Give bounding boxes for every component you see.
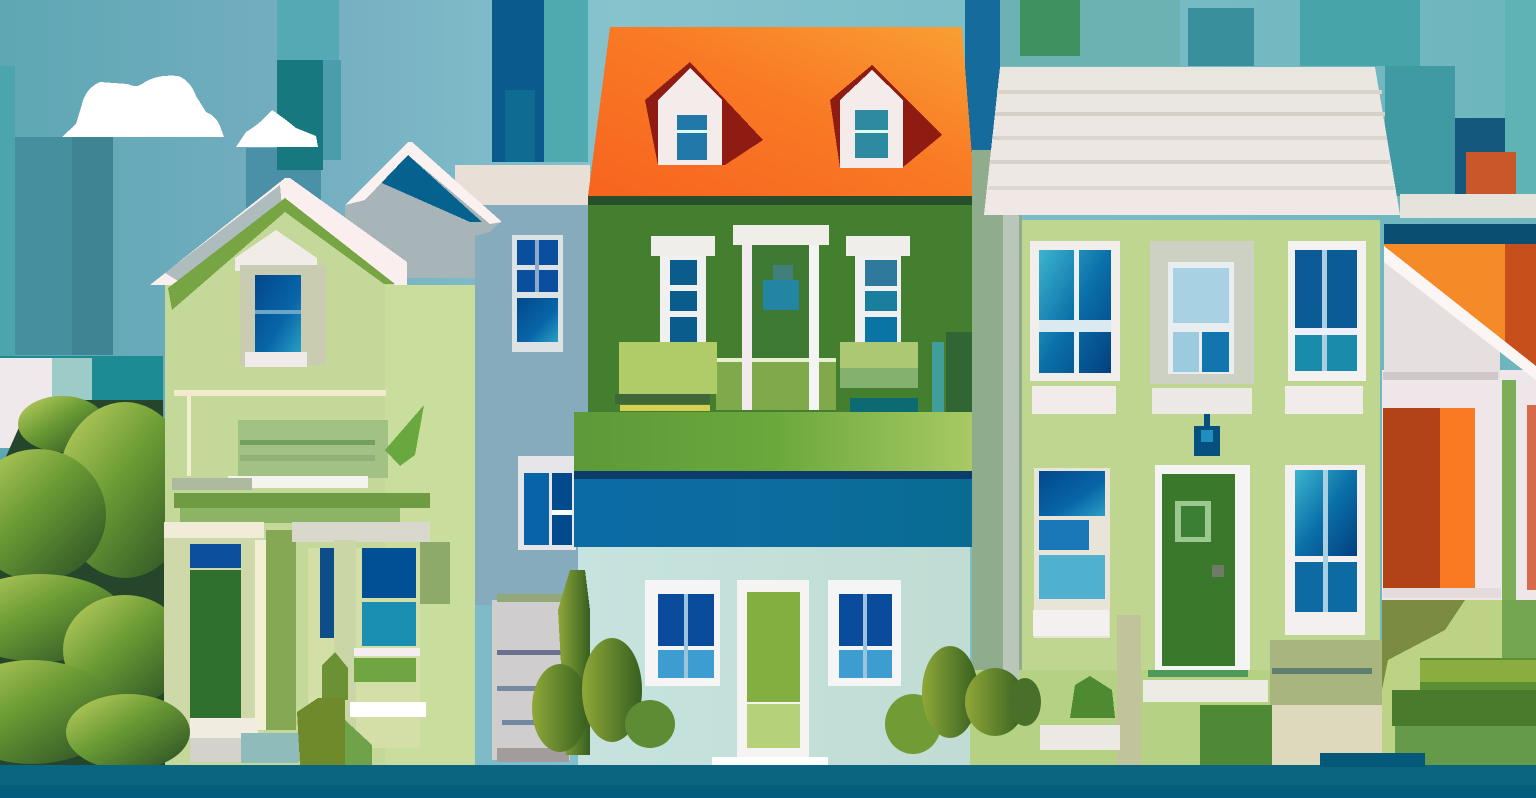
band: balcony front [574, 412, 972, 471]
window: right upper right [1285, 241, 1366, 414]
window: centre upper right [846, 236, 910, 345]
window: left house lower [292, 522, 450, 748]
balcony posts over furniture [742, 345, 819, 410]
shrub: left house entry [297, 652, 372, 765]
house: left green house [150, 178, 475, 765]
window: right upper centre [1150, 241, 1254, 414]
band: blue fascia [574, 471, 972, 479]
door: right house [1143, 465, 1268, 702]
white gable wall [1384, 258, 1500, 378]
chimney and roof cap [1384, 152, 1536, 244]
panel: orange wall [1383, 408, 1440, 588]
window: centre lower left [645, 580, 720, 686]
pediment: left house [235, 230, 317, 271]
dormer: left [645, 62, 763, 165]
house: right pale green [970, 67, 1400, 765]
window: right upper left [1030, 241, 1120, 414]
street: teal foreground [0, 753, 1536, 798]
house: far right orange [1382, 152, 1536, 766]
door: centre lower [712, 580, 828, 765]
column: grey side wall [972, 150, 1022, 670]
dormer: right [830, 65, 942, 168]
cloud: large [62, 76, 224, 137]
window: blue house upper [512, 235, 563, 352]
lawn: right [1382, 600, 1536, 765]
window: centre lower right [828, 580, 901, 686]
window: left house upper [240, 265, 326, 367]
balcony door [733, 225, 829, 410]
window: right lower right [1285, 465, 1365, 635]
wall: pale lower storey [578, 547, 970, 765]
lawn: base under right house [970, 670, 1400, 765]
shrub: tall cypress [558, 570, 590, 755]
window: centre upper left [651, 236, 715, 345]
city skyline [0, 0, 1536, 448]
bushes: front left [66, 694, 190, 770]
shrub: centre left [532, 638, 675, 752]
wall: right house [1022, 220, 1380, 680]
window: right lower left [1033, 468, 1110, 638]
leaf: balcony plant [385, 405, 424, 466]
window: blue house lower [518, 456, 576, 550]
wall: dark green upper storey [588, 196, 972, 412]
hedge: right [1420, 658, 1536, 728]
steps: grey side stairs [492, 594, 570, 762]
roof: orange [588, 27, 975, 196]
roof: white clapboard [984, 67, 1400, 215]
porch: left door surround [164, 522, 299, 763]
roof: orange right [1384, 244, 1536, 368]
lantern [1194, 414, 1220, 456]
cloud: small [236, 110, 318, 147]
balcony furniture [615, 332, 972, 412]
bushes: left behind house [0, 396, 193, 765]
roof: left gable [150, 178, 407, 285]
house: blue-grey back house [345, 142, 590, 762]
shrub: centre right [885, 646, 1041, 754]
balcony railing [172, 390, 430, 523]
house: centre [574, 27, 975, 765]
lawn and front steps [1040, 615, 1390, 765]
